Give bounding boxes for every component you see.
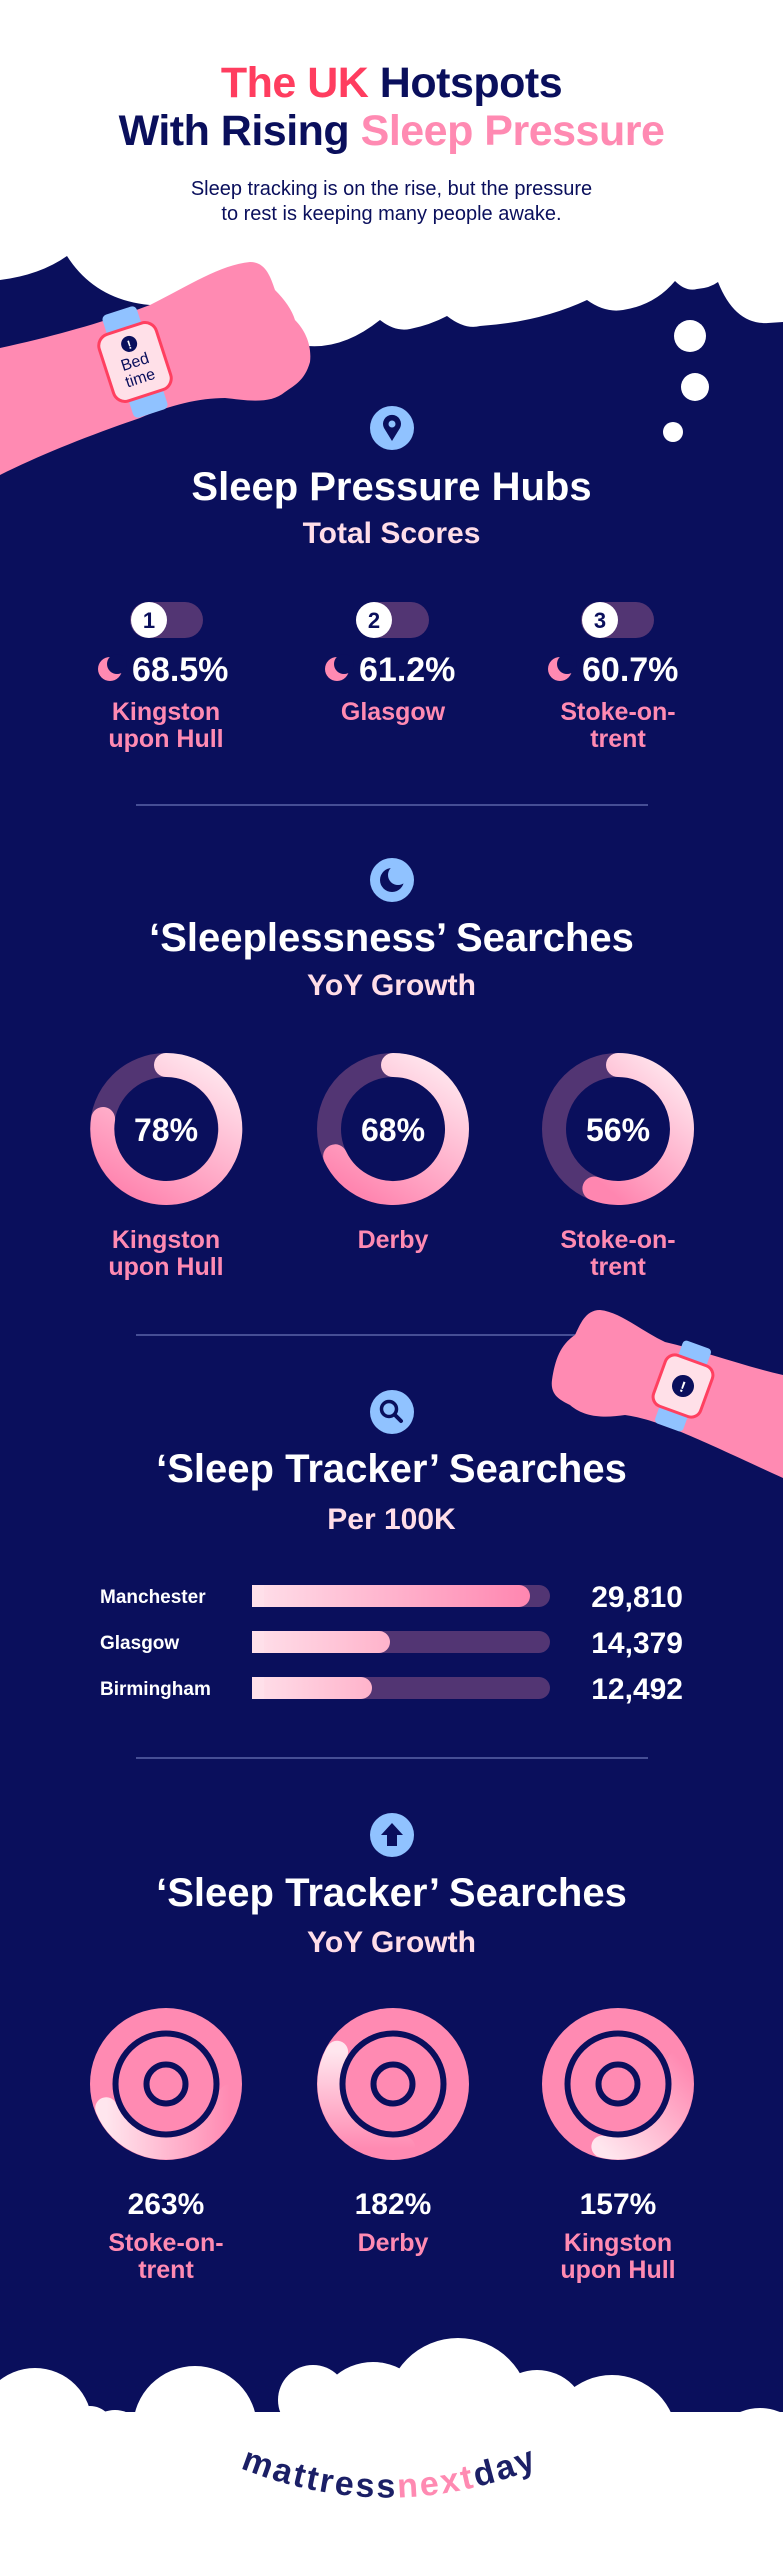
donut 78% — [102, 1065, 230, 1281]
rank 1: 1 — [143, 608, 155, 633]
bar: birmingham: Birmingham — [100, 1679, 211, 1700]
bar: manchester — [100, 1581, 683, 1614]
icon: search — [370, 1390, 414, 1434]
rank 1 — [98, 602, 228, 753]
icon: hand with bedtime watch: Bed — [119, 350, 151, 375]
heading: sleep tracker yoy: ‘Sleep Tracker’ Searches — [156, 1871, 627, 1915]
bar: birmingham — [100, 1673, 683, 1706]
target: derby: 182% — [355, 2188, 431, 2221]
target: derby — [317, 2008, 469, 2257]
heading: sleeplessness searches — [149, 916, 634, 1002]
heading: sleep tracker per 100k: ‘Sleep Tracker’ Searches — [156, 1447, 627, 1491]
heading: sleep pressure hubs — [191, 465, 592, 550]
donut 68%: Derby — [358, 1226, 429, 1254]
heading: sleeplessness searches: YoY Growth — [307, 969, 476, 1002]
heading: sleep tracker yoy — [156, 1871, 627, 1959]
subtitle — [191, 178, 592, 225]
target: stoke-on-trent: trent — [138, 2256, 194, 2284]
rank 3: Stoke-on- — [560, 698, 676, 726]
target: kingston upon hull — [542, 2008, 694, 2284]
bar: glasgow: Glasgow — [100, 1633, 179, 1654]
rank 2 — [325, 602, 455, 726]
heading: sleep pressure hubs: Sleep Pressure Hubs — [191, 465, 592, 509]
heading: sleep tracker per 100k — [156, 1447, 627, 1536]
logo: mattressnextday: mattressnextday — [242, 2450, 531, 2498]
icon: hand with bedtime watch: time — [123, 366, 158, 391]
target: kingston upon hull: upon Hull — [560, 2256, 676, 2284]
rank 3: 3 — [594, 608, 606, 633]
bar: glasgow: 14,379 — [591, 1627, 683, 1660]
donut 56%: Stoke-on- — [560, 1226, 676, 1254]
rank 1: upon Hull — [108, 725, 224, 753]
donut 56%: 56% — [586, 1112, 650, 1148]
chart: target rings — [90, 2008, 694, 2284]
icon: hand with bedtime watch: ! — [125, 338, 134, 352]
heading: sleep tracker per 100k: Per 100K — [327, 1503, 456, 1536]
donut 78%: upon Hull — [108, 1253, 224, 1281]
icon: hand with alert watch — [552, 1310, 783, 1478]
title: With Rising Sleep Pressure — [119, 107, 664, 155]
heading: sleep pressure hubs: Total Scores — [303, 517, 480, 550]
bar: birmingham: 12,492 — [591, 1673, 683, 1706]
title: The UK Hotspots — [221, 59, 562, 107]
icon: hand with alert watch: ! — [677, 1379, 688, 1396]
icon: thought bubbles — [663, 320, 709, 442]
target: stoke-on-trent — [90, 2008, 242, 2284]
donut 56% — [554, 1065, 682, 1281]
bar: manchester: 29,810 — [591, 1581, 683, 1614]
rank 3 — [548, 602, 678, 753]
target: stoke-on-trent: 263% — [128, 2188, 204, 2221]
icon: moon — [370, 858, 414, 902]
donut 78%: 78% — [134, 1112, 198, 1148]
target: derby: Derby — [358, 2229, 429, 2257]
bar: manchester: Manchester — [100, 1587, 206, 1608]
chart: sleeplessness donuts — [102, 1065, 682, 1281]
donut 68%: 68% — [361, 1112, 425, 1148]
icon: location pin — [370, 406, 414, 450]
bar chart: sleep tracker per 100k — [100, 1581, 683, 1706]
heading: sleep tracker yoy: YoY Growth — [307, 1926, 476, 1959]
subtitle: to rest is keeping many people awake. — [221, 203, 562, 225]
donut 56%: trent — [590, 1253, 646, 1281]
rank 1: 68.5% — [132, 651, 228, 689]
target: kingston upon hull: 157% — [580, 2188, 656, 2221]
rank 2: Glasgow — [341, 698, 446, 726]
rank 3: trent — [590, 725, 646, 753]
target: kingston upon hull: Kingston — [564, 2229, 672, 2257]
donut 78%: Kingston — [112, 1226, 220, 1254]
subtitle: Sleep tracking is on the rise, but the pressure — [191, 178, 592, 200]
title — [119, 59, 664, 155]
target: stoke-on-trent: Stoke-on- — [108, 2229, 224, 2257]
donut 68% — [329, 1065, 457, 1254]
rank 1: Kingston — [112, 698, 220, 726]
rank 3: 60.7% — [582, 651, 678, 689]
panel: total scores — [98, 602, 678, 753]
logo: mattressnextday — [242, 2450, 531, 2498]
bar: glasgow — [100, 1627, 683, 1660]
icon: up arrow — [370, 1813, 414, 1857]
icon: hand with bedtime watch — [0, 262, 310, 475]
rank 2: 2 — [368, 608, 380, 633]
heading: sleeplessness searches: ‘Sleeplessness’ Searches — [149, 916, 634, 960]
rank 2: 61.2% — [359, 651, 455, 689]
